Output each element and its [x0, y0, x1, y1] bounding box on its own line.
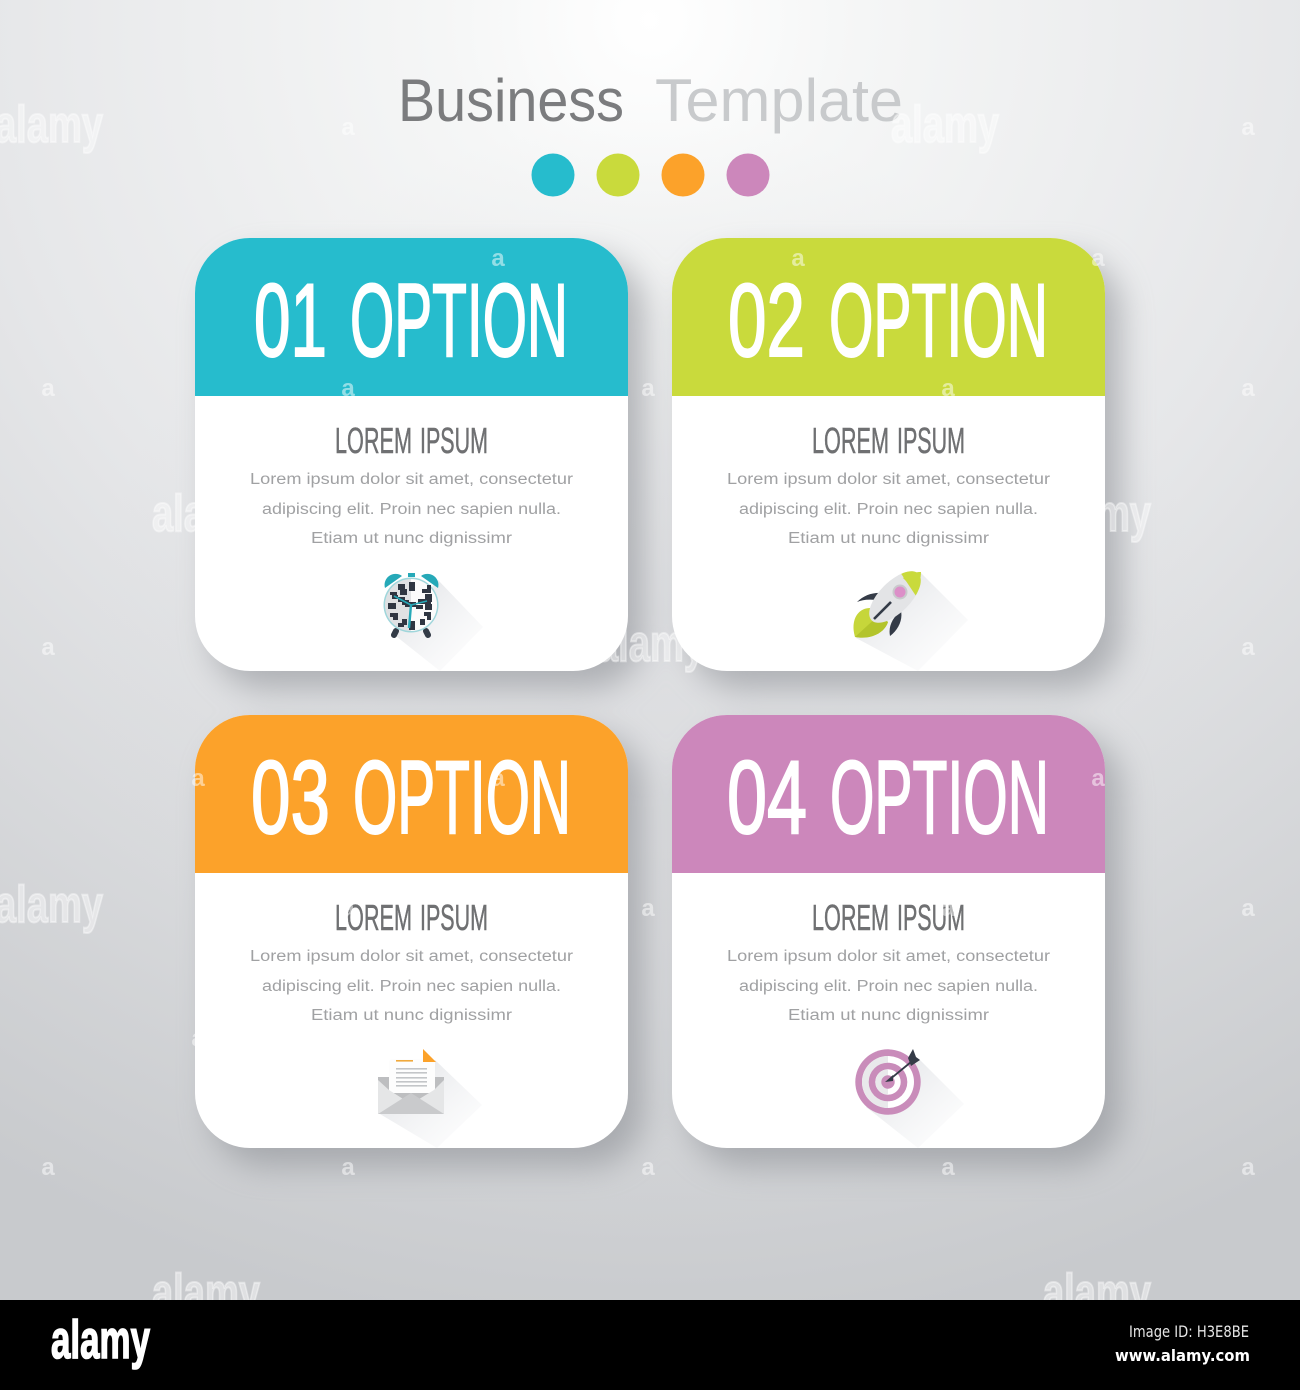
watermarks: alamy: [1043, 1264, 1151, 1322]
body text 04: adipiscing elit. Proin nec sapien nulla.: [739, 978, 1038, 995]
panel: option 01: [195, 238, 628, 671]
header band 04: [672, 715, 1105, 873]
subheading 03: IPSUM: [420, 897, 488, 938]
body text 04: Etiam ut nunc dignissimr: [788, 1007, 989, 1024]
watermarks: alamy: [891, 96, 999, 154]
body text 04: [727, 948, 1050, 1024]
header band 01: [195, 238, 628, 396]
heading 01: [254, 263, 568, 379]
small watermark marks: a: [491, 765, 505, 792]
small watermark marks: a: [1241, 895, 1255, 922]
subheading 04: LOREM: [812, 897, 889, 938]
heading 01: OPTION: [350, 263, 568, 379]
icon: target: [855, 1049, 964, 1148]
small watermark marks: a: [41, 1154, 55, 1181]
heading 02: [728, 263, 1048, 379]
small watermark marks: a: [341, 375, 355, 402]
small watermark marks: a: [641, 375, 655, 402]
subheading 02: IPSUM: [897, 420, 965, 461]
subheading 04: IPSUM: [897, 897, 965, 938]
small watermark marks: a: [41, 375, 55, 402]
body text 03: [250, 948, 573, 1024]
small watermark marks: a: [941, 1154, 955, 1181]
watermarks: [0, 96, 1151, 1322]
body text 01: Etiam ut nunc dignissimr: [311, 530, 512, 547]
small watermark marks: a: [1241, 375, 1255, 402]
small watermark marks: a: [191, 765, 205, 792]
header band 02: [672, 238, 1105, 396]
small watermark marks: a: [1091, 765, 1105, 792]
title: Template: [655, 67, 903, 134]
small watermark marks: a: [341, 1154, 355, 1181]
small watermark marks: [41, 114, 1255, 1181]
subheading 03: LOREM: [335, 897, 412, 938]
small watermark marks: a: [641, 895, 655, 922]
body text 01: [250, 471, 573, 547]
heading 04: [727, 740, 1049, 856]
subheading 01: LOREM: [335, 420, 412, 461]
small watermark marks: a: [491, 245, 505, 272]
small watermark marks: a: [1241, 114, 1255, 141]
heading 04: 04: [727, 740, 807, 856]
body text 03: Etiam ut nunc dignissimr: [311, 1007, 512, 1024]
heading 02: OPTION: [829, 263, 1048, 379]
body text 03: Lorem ipsum dolor sit amet, consectetur: [250, 948, 573, 965]
title: [398, 67, 903, 134]
heading 03: [251, 740, 571, 856]
icon: rocket: [854, 571, 958, 660]
body text 02: [727, 471, 1050, 547]
body text 01: adipiscing elit. Proin nec sapien nulla.: [262, 501, 561, 518]
body text 02: Lorem ipsum dolor sit amet, consectetur: [727, 471, 1050, 488]
watermarks: alamy: [597, 615, 705, 673]
small watermark marks: a: [341, 114, 355, 141]
small watermark marks: a: [791, 245, 805, 272]
small watermark marks: a: [1091, 245, 1105, 272]
colour dots: [532, 154, 770, 196]
small watermark marks: a: [41, 634, 55, 661]
title: Business: [398, 67, 624, 134]
small watermark marks: a: [341, 895, 355, 922]
site url: www.alamy.com: [1115, 1346, 1250, 1365]
small watermark marks: a: [941, 895, 955, 922]
card shadows: [211, 256, 1121, 1166]
footer bar: [0, 1300, 1300, 1390]
watermarks: alamy: [1043, 485, 1151, 543]
small watermark marks: a: [1241, 634, 1255, 661]
heading 01: 01: [254, 263, 327, 379]
small watermark marks: a: [941, 375, 955, 402]
icon: envelope: [378, 1049, 482, 1148]
subheading 01: IPSUM: [420, 420, 488, 461]
body text 02: Etiam ut nunc dignissimr: [788, 530, 989, 547]
body text 02: adipiscing elit. Proin nec sapien nulla.: [739, 501, 1038, 518]
panel: option 04: [672, 715, 1105, 1148]
body text 04: Lorem ipsum dolor sit amet, consectetur: [727, 948, 1050, 965]
watermarks: alamy: [152, 1264, 260, 1322]
small watermark marks: a: [641, 1154, 655, 1181]
icon: alarm clock: [384, 573, 483, 671]
heading 04: OPTION: [830, 740, 1049, 856]
subheading 02: LOREM: [812, 420, 889, 461]
small watermark marks: a: [1241, 1154, 1255, 1181]
footer logo: alamy: [51, 1310, 150, 1370]
image id: Image ID: H3E8BE: [1129, 1322, 1249, 1341]
panel: option 02: [672, 238, 1105, 671]
body text 03: adipiscing elit. Proin nec sapien nulla.: [262, 978, 561, 995]
small watermark marks: a: [191, 1025, 205, 1052]
header band 03: [195, 715, 628, 873]
body text 01: Lorem ipsum dolor sit amet, consectetur: [250, 471, 573, 488]
watermarks: alamy: [152, 485, 260, 543]
panel: option 03: [195, 715, 628, 1148]
heading 03: 03: [251, 740, 330, 856]
heading 02: 02: [728, 263, 805, 379]
heading 03: OPTION: [353, 740, 571, 856]
